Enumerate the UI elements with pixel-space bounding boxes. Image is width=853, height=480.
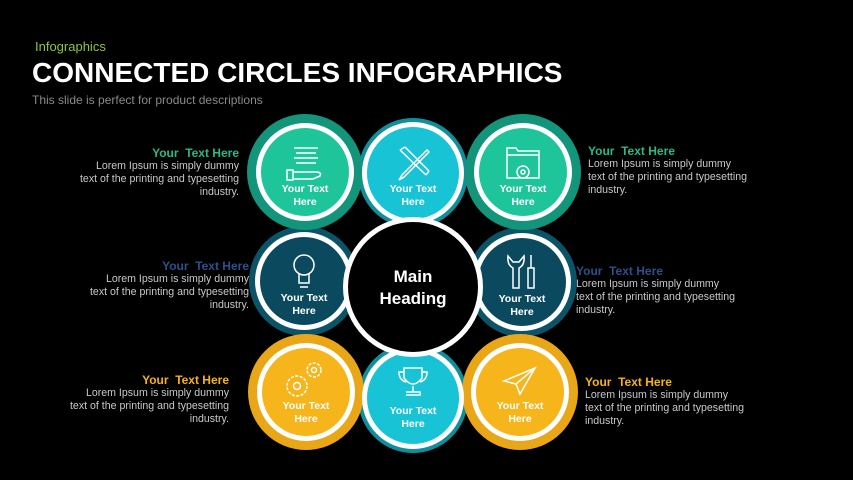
circle: top middle: Your Text [390,183,437,195]
text block: top left [80,146,239,198]
icon: light bulb [294,255,314,287]
text block: top left: Lorem Ipsum is simply dummy [96,160,239,172]
circle: bottom right: Your Text [497,400,544,412]
text block: bottom right: text of the printing and typesetting [585,402,744,414]
circle: bottom right [471,343,569,441]
circle: middle left: Your Text [281,292,328,304]
icon: hand with stack [287,148,320,180]
text block: middle left: industry. [210,299,249,311]
circle: middle right: Your Text [499,293,546,305]
text block: top right: industry. [588,184,627,196]
text block: top left: industry. [200,186,239,198]
circle: bottom left [257,343,355,441]
circle: top right: Here [511,196,535,208]
text block: bottom left: Your Text Here [142,373,229,387]
subtitle: This slide is perfect for product descriptions [32,93,263,107]
text block: middle right: industry. [576,304,615,316]
text block: top right: text of the printing and typesetting [588,171,747,183]
circle: middle left: Here [292,305,316,317]
circle: top middle: Here [401,196,425,208]
circle: bottom right: Here [508,413,532,425]
icon: paper plane [504,368,535,394]
circle: top left: Your Text [282,183,329,195]
title: CONNECTED CIRCLES INFOGRAPHICS [32,57,562,88]
circle: top middle [362,122,464,224]
text block: middle left: Lorem Ipsum is simply dummy [106,273,249,285]
circle: top left: Here [293,196,317,208]
center: main heading: Main [394,267,432,286]
circle: bottom left: Your Text [283,400,330,412]
text block: middle left: Your Text Here [162,259,249,273]
text block: middle right: Lorem Ipsum is simply dummy [576,278,719,290]
circle: bottom middle [362,347,464,449]
text block: middle right: text of the printing and typesetting [576,291,735,303]
circle: bottom middle: Your Text [390,405,437,417]
text block: middle right: Your Text Here [576,264,663,278]
text block: bottom right [585,375,744,427]
circle: bottom left: Here [294,413,318,425]
outer rings [247,114,581,453]
text block: top right: Lorem Ipsum is simply dummy [588,158,731,170]
text block: bottom right: Lorem Ipsum is simply dummy [585,389,728,401]
text block: middle left: text of the printing and typesetting [90,286,249,298]
circle: bottom middle: Here [401,418,425,430]
icon: folder gear [507,148,539,178]
circle: middle right: Here [510,306,534,318]
text block: bottom left [70,373,229,425]
icon: trophy [399,368,427,395]
text block: top right [588,144,747,196]
circle: top left [256,123,354,221]
icon: pencil ruler [399,147,429,180]
text block: middle right [576,264,735,316]
text block: bottom right: industry. [585,415,624,427]
circle: top right [474,123,572,221]
label: infographics: Infographics [35,39,106,54]
text block: top left: Your Text Here [152,146,239,160]
text block: top left: text of the printing and typesetting [80,173,239,185]
text block: top right: Your Text Here [588,144,675,158]
circle: middle left [255,232,353,330]
center: main heading: Heading [379,289,447,308]
icon: tools [508,255,534,288]
icon: gears [287,363,321,396]
text block: bottom left: Lorem Ipsum is simply dummy [86,387,229,399]
center: main heading [343,217,483,357]
text block: middle left [90,259,249,311]
circle: middle right [473,233,571,331]
text block: bottom right: Your Text Here [585,375,672,389]
text block: bottom left: text of the printing and typesetting [70,400,229,412]
text block: bottom left: industry. [190,413,229,425]
circle: top right: Your Text [500,183,547,195]
